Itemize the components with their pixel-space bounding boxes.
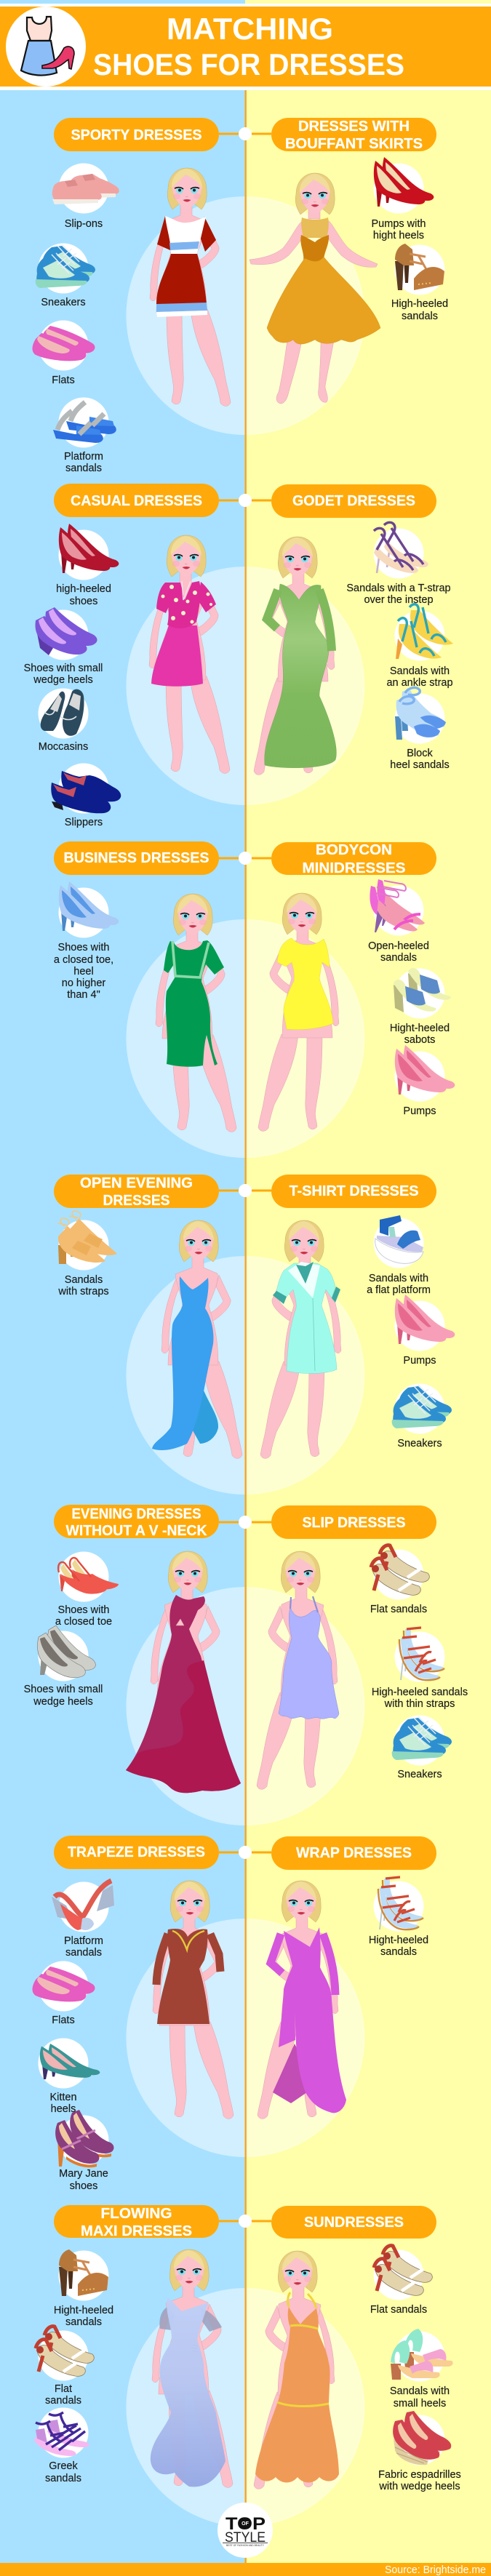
label: heels <box>51 2103 76 2115</box>
shoe: platform sandals <box>52 1881 114 1932</box>
label: hight heels <box>373 230 424 241</box>
label: Open-heeled <box>368 940 429 952</box>
icon: dress and shoe <box>6 7 86 87</box>
label: Fabric espadrilles <box>378 2469 461 2481</box>
shoe: t-strap sandals <box>374 522 428 579</box>
label: Flat <box>55 2383 72 2395</box>
label: Pumps <box>403 1355 436 1367</box>
label: sabots <box>404 1034 435 1046</box>
connector <box>219 1184 271 1197</box>
label: with wedge heels <box>378 2481 460 2492</box>
label: Sneakers <box>41 297 86 308</box>
center divider line <box>244 90 247 2563</box>
figure: sporty dress <box>150 168 231 406</box>
shoe: high-heeled sandals <box>374 1877 423 1932</box>
connector <box>219 1516 271 1529</box>
heading: bodycon minidresses: MINIDRESSES <box>303 860 406 876</box>
label: Shoes with small <box>24 1684 103 1695</box>
shoe: sandals with straps <box>57 1211 117 1270</box>
label <box>378 2469 461 2492</box>
figure: sundress <box>254 2251 339 2489</box>
label: Platform <box>64 1935 103 1947</box>
label: high-heeled <box>56 583 111 595</box>
heading: wrap dresses: WRAP DRESSES <box>296 1845 412 1861</box>
shoe: high-heeled sabots <box>394 968 450 1018</box>
label: shoes <box>70 2180 97 2192</box>
label: Platform <box>64 451 103 463</box>
connector <box>219 852 271 865</box>
label <box>386 665 453 689</box>
label: Flats <box>52 375 75 386</box>
shoe: fabric espadrilles <box>393 2411 451 2465</box>
shoe: open-heeled sandals <box>370 879 425 935</box>
section: sporty dresses / bouffant skirts <box>32 118 448 474</box>
label: Slippers <box>65 817 103 828</box>
label: sandals <box>380 1946 417 1958</box>
label <box>57 1274 109 1297</box>
heading: dresses with bouffant skirts: DRESSES WITH <box>298 119 410 135</box>
label <box>391 298 448 322</box>
label: Shoes with small <box>24 663 103 674</box>
shoe: slippers <box>51 764 121 813</box>
connector <box>219 1846 271 1859</box>
shoe: ankle strap sandals <box>394 604 453 660</box>
heading: open evening dresses: OPEN EVENING <box>80 1175 193 1191</box>
label: small heels <box>394 2398 446 2409</box>
label <box>55 1604 112 1628</box>
label: sandals <box>45 2395 81 2407</box>
top strip <box>0 0 491 4</box>
shoe: flat sandals <box>36 2327 94 2381</box>
heading: flowing maxi dresses: FLOWING <box>100 2206 172 2222</box>
label: with straps <box>57 1286 109 1297</box>
shoe: pumps <box>394 1045 455 1101</box>
label <box>64 1935 103 1959</box>
panel: blue left background <box>0 90 245 2563</box>
label <box>390 2385 450 2409</box>
heading: bodycon minidresses: BODYCON <box>316 842 392 858</box>
section: business / bodycon <box>54 841 455 1132</box>
label: sandals <box>65 1947 102 1959</box>
heading: evening dresses without a v-neck: EVENING DRESSES <box>71 1506 201 1522</box>
heading: wrap dresses <box>271 1836 436 1870</box>
heading: t-shirt dresses: T-SHIRT DRESSES <box>290 1183 419 1199</box>
footer band <box>0 2563 491 2576</box>
label <box>54 942 113 1001</box>
shoe: slip-ons <box>52 163 119 214</box>
label <box>45 2460 81 2484</box>
label: Sneakers <box>397 1438 442 1449</box>
label: heel <box>73 966 94 977</box>
label: Shoes with <box>58 1604 109 1616</box>
heading: slip dresses: SLIP DRESSES <box>303 1515 406 1531</box>
figure: trapeze dress <box>153 1881 233 2119</box>
label <box>64 451 103 474</box>
figure: business dress <box>156 894 236 1132</box>
label <box>372 218 426 241</box>
figure: godet dress <box>254 537 336 775</box>
label: shoes <box>70 596 97 607</box>
label: sandals <box>402 311 438 322</box>
shoe: greek sandals <box>34 2407 89 2458</box>
heading: sporty dresses: SPORTY DRESSES <box>71 127 202 143</box>
label: Hight-heeled <box>369 1935 428 1946</box>
label: Moccasins <box>39 741 88 753</box>
logo: top of style <box>217 2503 273 2558</box>
section: trapeze / wrap <box>32 1836 436 2192</box>
shoe: sneakers <box>392 1383 452 1434</box>
shoe: high-heeled sandals <box>394 244 445 295</box>
heading: slip dresses <box>271 1505 436 1539</box>
heading: godet dresses <box>271 484 436 518</box>
shoe: sandals with small heels <box>391 2329 453 2381</box>
label: Flats <box>52 2015 75 2026</box>
label: Sneakers <box>397 1769 442 1780</box>
figure: t-shirt dress <box>260 1220 341 1458</box>
section: casual / godet dresses <box>24 484 453 828</box>
heading: sundresses: SUNDRESSES <box>304 2215 404 2231</box>
label: sandals <box>45 2473 81 2484</box>
figure: wrap dress <box>258 1881 346 2119</box>
large background circles <box>127 196 365 2527</box>
heading: sporty dresses <box>54 118 219 151</box>
shoe: flat sandals <box>374 2246 432 2300</box>
label: High-heeled <box>391 298 448 310</box>
panel: yellow right background <box>245 90 491 2563</box>
label <box>56 583 111 607</box>
heading: business dresses: BUSINESS DRESSES <box>64 850 209 866</box>
heading: dresses with bouffant skirts: BOUFFANT SKIRTS <box>285 136 423 152</box>
shoe: sneakers <box>392 1715 452 1766</box>
header band <box>0 7 491 87</box>
shoe: kitten heels <box>38 2038 100 2089</box>
title: SHOES FOR DRESSES <box>93 47 404 81</box>
shoe: flats <box>32 1961 95 2012</box>
label: Shoes with <box>58 942 109 953</box>
shoe: high-heeled shoes <box>58 524 119 580</box>
label <box>372 1687 468 1710</box>
title: MATCHING <box>167 12 333 46</box>
heading: evening dresses without a v-neck <box>54 1505 219 1539</box>
label: wedge heels <box>33 1696 93 1708</box>
label: High-heeled sandals <box>372 1687 468 1698</box>
label: sandals <box>380 952 417 964</box>
label: Pumps <box>403 1105 436 1117</box>
label <box>368 940 429 964</box>
label <box>390 748 450 771</box>
label: Kitten <box>49 2092 77 2103</box>
label: Block <box>407 748 433 759</box>
label: Hight-heeled <box>54 2305 113 2316</box>
figure: evening dress <box>126 1551 241 1793</box>
shoe: small wedge heels <box>36 607 97 660</box>
logo: top of style: BEST OF FASHION AND BEAUTY <box>226 2543 264 2547</box>
heading: casual dresses <box>54 484 219 517</box>
figure: bodycon dress <box>258 893 339 1131</box>
heading: bodycon minidresses <box>271 842 436 876</box>
label: sandals <box>65 463 102 474</box>
figure: bouffant dress <box>250 173 380 404</box>
label <box>59 2168 108 2192</box>
heading: godet dresses: GODET DRESSES <box>292 493 415 509</box>
label: Sandals with <box>390 665 450 677</box>
label <box>390 1023 450 1046</box>
heading: t-shirt dresses <box>271 1175 436 1208</box>
connector <box>219 494 271 507</box>
label: Sandals with <box>369 1273 428 1284</box>
label: heel sandals <box>390 759 450 771</box>
connector <box>219 2215 271 2228</box>
figure: flowing maxi dress <box>151 2249 233 2487</box>
label: over the instep <box>364 594 434 606</box>
heading: flowing maxi dresses: MAXI DRESSES <box>81 2223 192 2239</box>
shoe: high-heeled sandals <box>58 2249 109 2301</box>
shoe: thin strap sandals <box>394 1628 445 1681</box>
heading: sundresses <box>271 2206 436 2239</box>
section: flowing maxi / sundresses <box>34 2205 461 2492</box>
shoe: block heel sandals <box>394 688 446 743</box>
label <box>369 1935 428 1958</box>
shoe: platform sandals <box>53 397 116 448</box>
label: wedge heels <box>33 674 93 686</box>
shoe: moccasins <box>38 688 89 739</box>
label: Sandals <box>65 1274 103 1286</box>
heading: open evening dresses: DRESSES <box>103 1193 170 1209</box>
shoe: mary jane shoes <box>55 2110 113 2167</box>
label: Greek <box>49 2460 78 2472</box>
label: Slip-ons <box>65 218 103 230</box>
connector <box>219 127 271 140</box>
section: evening without v-neck / slip <box>24 1505 468 1793</box>
shoe: sneakers <box>36 243 95 294</box>
label: Hight-heeled <box>390 1023 450 1034</box>
label: sandals <box>65 2316 102 2328</box>
shoe: closed toe <box>58 1552 119 1601</box>
label <box>24 1684 103 1708</box>
section: open evening / t-shirt <box>54 1175 455 1458</box>
source credit: Source: Brightside.me <box>385 2564 486 2576</box>
logo: top of style: OF <box>241 2521 250 2527</box>
shoe: flat sandals <box>371 1545 429 1600</box>
label: Sandals with a T-strap <box>346 583 451 594</box>
label: Flat sandals <box>370 2304 427 2316</box>
logo: top of style: STYLE <box>225 2530 266 2545</box>
label <box>346 583 451 606</box>
shoe: flats <box>32 320 95 371</box>
shoe: closed toe heel <box>58 881 119 938</box>
heading: casual dresses: CASUAL DRESSES <box>71 493 202 509</box>
figure: casual dress <box>149 535 230 773</box>
label: Mary Jane <box>59 2168 108 2180</box>
shoe: flat platform sandals <box>374 1215 423 1268</box>
label: than 4" <box>67 989 100 1001</box>
label <box>54 2305 113 2328</box>
logo: top of style: TOP <box>225 2514 266 2534</box>
label: no higher <box>62 977 105 989</box>
label: with thin straps <box>384 1698 455 1710</box>
shoe: pumps with high heels <box>374 157 434 214</box>
label <box>49 2092 77 2115</box>
figure: open evening dress <box>152 1220 242 1458</box>
label: a closed toe <box>55 1616 112 1628</box>
label: Sandals with <box>390 2385 450 2397</box>
heading: open evening dresses <box>54 1175 219 1209</box>
heading: trapeze dresses: TRAPEZE DRESSES <box>68 1844 205 1860</box>
label: Flat sandals <box>370 1604 427 1615</box>
heading: trapeze dresses <box>54 1836 219 1869</box>
label: Pumps with <box>372 218 426 230</box>
label: an ankle strap <box>386 677 453 689</box>
heading: dresses with bouffant skirts <box>271 118 436 152</box>
figure: slip dress <box>257 1551 339 1789</box>
label <box>24 663 103 686</box>
label: a closed toe, <box>54 954 113 966</box>
heading: business dresses <box>54 841 219 875</box>
label <box>367 1273 431 1296</box>
shoe: small wedge heels <box>37 1625 95 1681</box>
heading: flowing maxi dresses <box>54 2205 219 2239</box>
heading: evening dresses without a v-neck: WITHOUT A V -NECK <box>65 1523 207 1539</box>
label <box>45 2383 81 2407</box>
label: a flat platform <box>367 1284 431 1296</box>
shoe: pumps <box>394 1295 455 1351</box>
